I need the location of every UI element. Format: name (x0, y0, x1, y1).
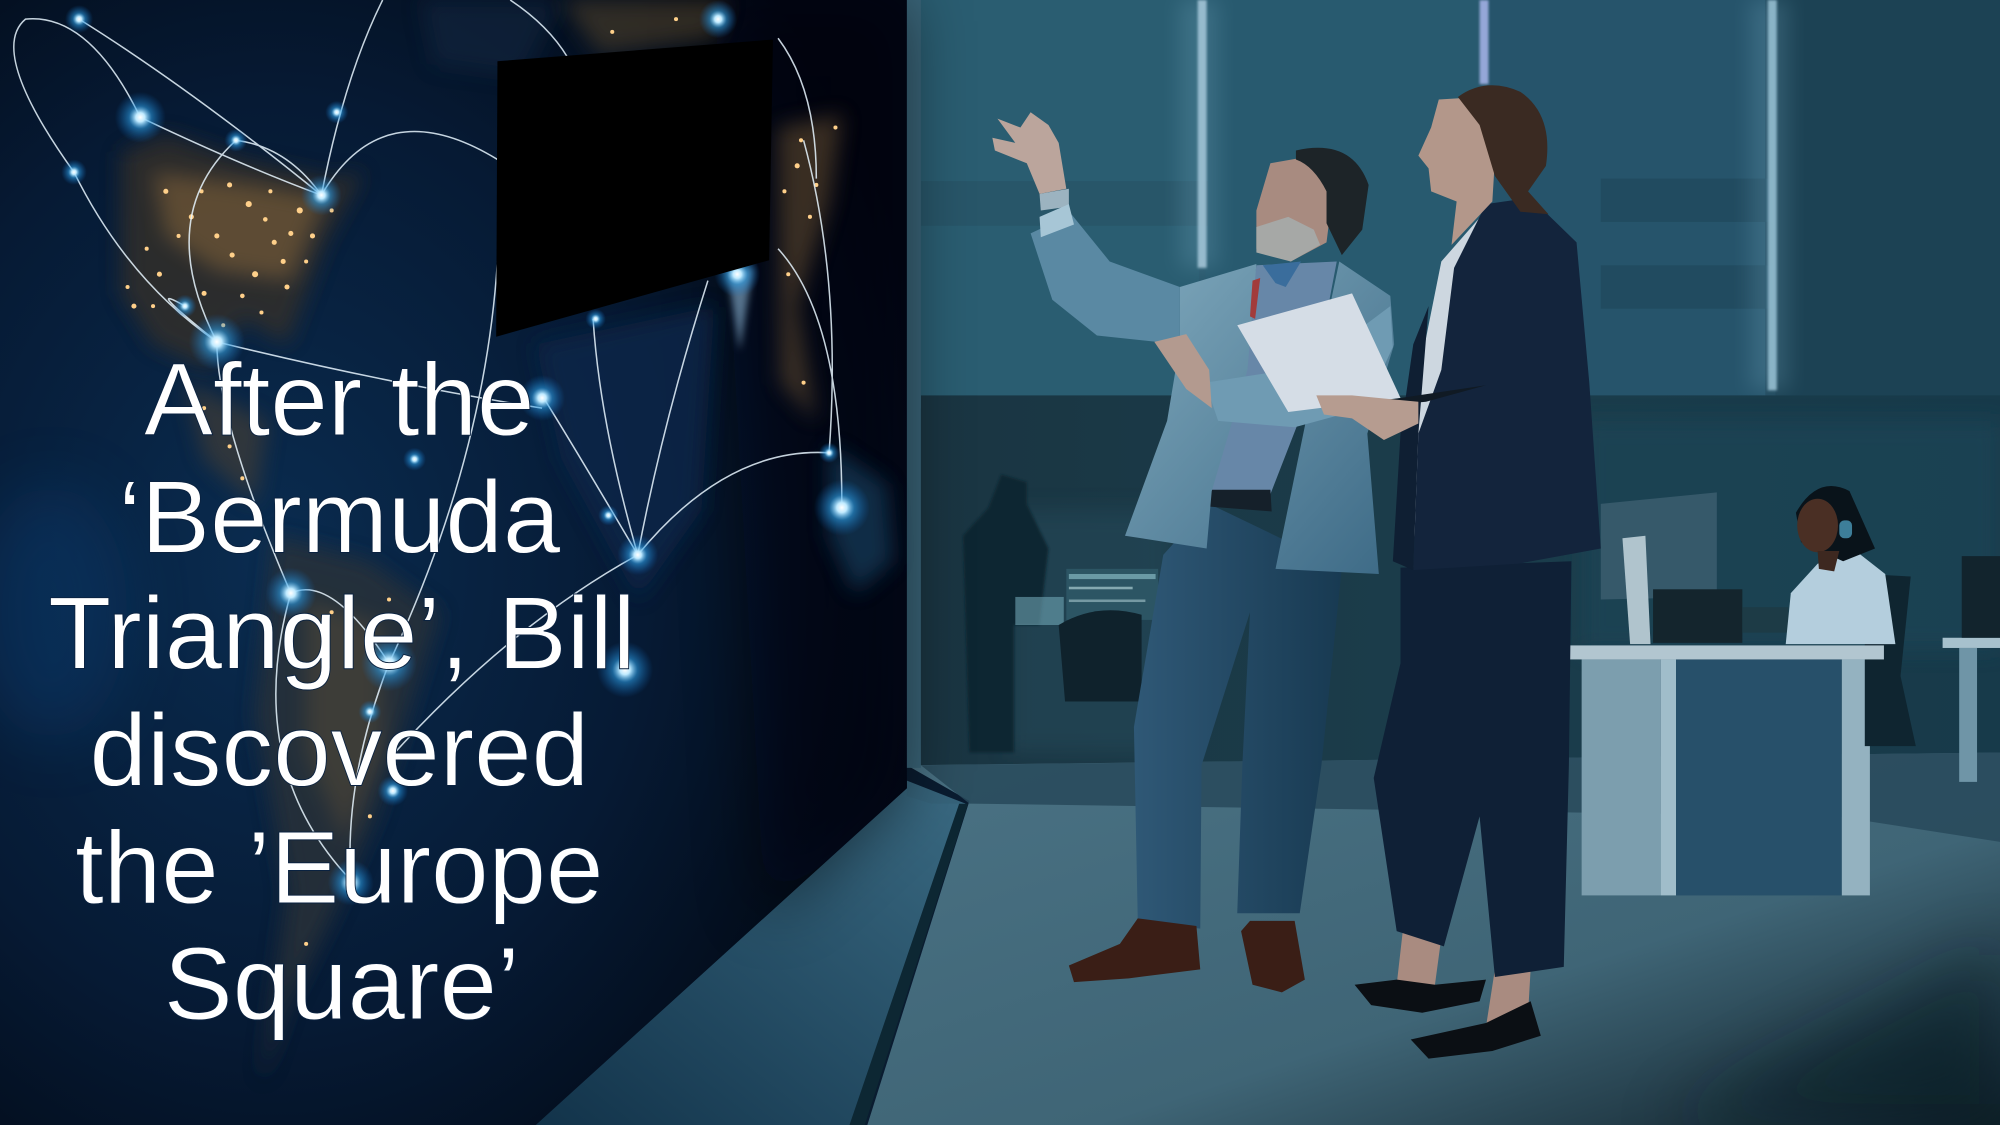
headline: Triangle’, Bill (48, 574, 636, 690)
headline: Square’ (164, 925, 520, 1041)
woman hair (1458, 85, 1548, 214)
woman blazer (1413, 198, 1601, 570)
headline: After the (144, 341, 535, 457)
back wall with panels (907, 0, 2000, 408)
laptop screen (1237, 293, 1401, 412)
man raised hand (992, 112, 1066, 194)
headline: ‘Bermuda (118, 458, 561, 574)
network arcs (14, 0, 842, 880)
foreground desk with monitor (1582, 492, 2000, 895)
man shirt (1209, 261, 1337, 497)
woman blazer lapel (1393, 306, 1429, 570)
man hair (1296, 148, 1369, 255)
man belt (1207, 490, 1272, 511)
man blazer (1125, 261, 1394, 574)
carpet edge and raised step (536, 781, 968, 1125)
black redaction rectangle (496, 40, 773, 337)
man folded arm (1205, 306, 1393, 427)
man trousers (1134, 504, 1342, 929)
man face (1256, 156, 1333, 261)
right side vignette (1658, 944, 2000, 1125)
man folded hand (1154, 334, 1212, 408)
desk top (1556, 645, 1884, 659)
woman shoes (1355, 980, 1541, 1059)
man beard (1256, 217, 1320, 261)
headline: discovered (90, 692, 589, 808)
woman hand (1316, 395, 1418, 440)
floor band behind carpet (921, 753, 2000, 842)
city lights: continents (121, 0, 893, 1084)
man tie (1263, 261, 1301, 287)
man shirt cuff (1040, 204, 1074, 237)
network glow nodes (61, 0, 870, 906)
man in light blue blazer (992, 112, 1394, 992)
woman neck and face (1418, 97, 1495, 245)
woman in dark suit (1237, 85, 1601, 1059)
woman blouse (1409, 210, 1486, 548)
wall light strips (1180, 0, 1788, 390)
seated woman at desk (1786, 486, 1916, 746)
woman ankles (1397, 929, 1531, 1027)
floor (867, 753, 2000, 1125)
man lanyard (1250, 278, 1260, 319)
man watch (1040, 189, 1069, 210)
back room figure and screens (963, 474, 1158, 753)
headline: the ’Europe (75, 809, 603, 925)
man raised arm (1031, 214, 1180, 344)
video wall with world map (0, 0, 921, 1125)
laptop base (1327, 385, 1486, 411)
headline (48, 341, 636, 1041)
woman trousers (1374, 561, 1571, 977)
man shoes (1069, 918, 1305, 992)
glass partition and back room (921, 395, 2000, 768)
